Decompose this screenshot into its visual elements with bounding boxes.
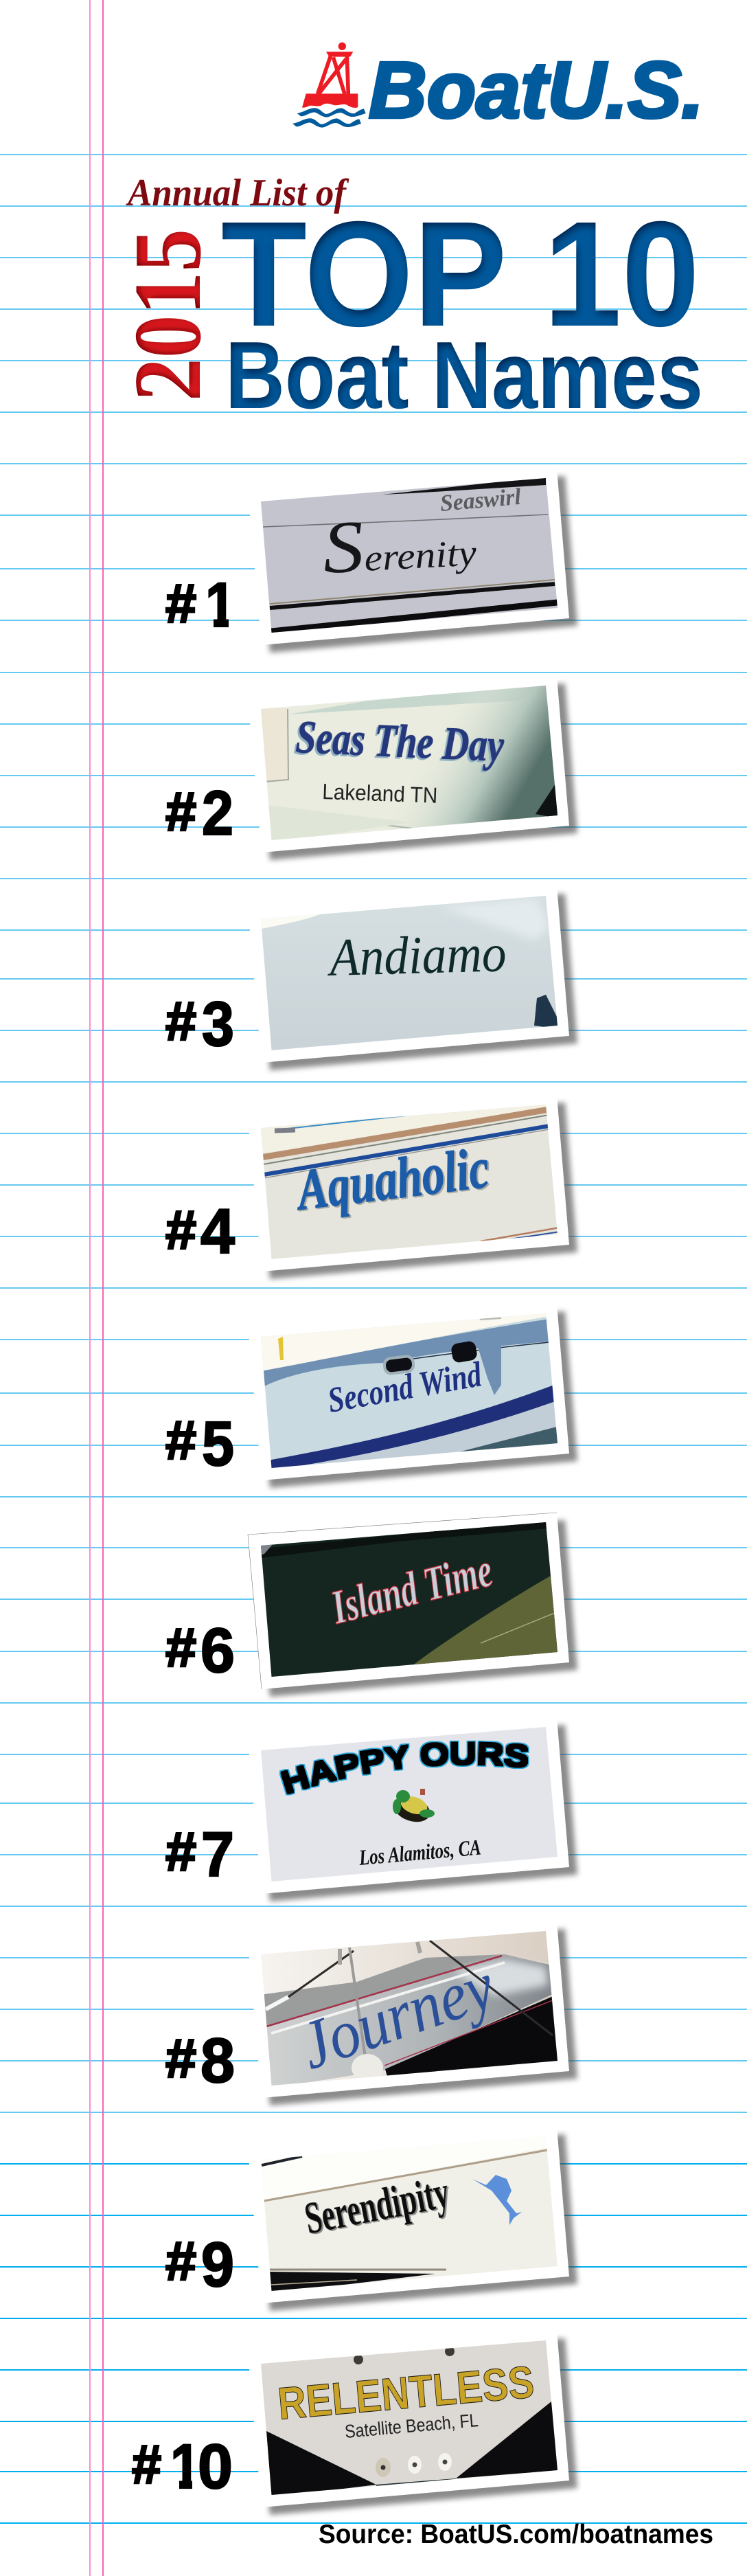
- rank: #1: #: [165, 573, 196, 634]
- rank: #1: 1: [205, 570, 235, 640]
- rank: #10: 0: [198, 2432, 233, 2502]
- rank: #9: [165, 2230, 234, 2300]
- rank: #5: #: [165, 1410, 196, 1471]
- icon: turtle with drink: [393, 1789, 435, 1822]
- subtitle: Annual List of: Annual List of: [126, 172, 349, 214]
- home port: Satellite Beach, FL: Satellite Beach, FL: [344, 2410, 479, 2442]
- rank: #7: [165, 1820, 234, 1890]
- photo card 9: Serendipity: [248, 2127, 577, 2311]
- boat name: Andiamo: Andiamo: [326, 923, 507, 987]
- boat name: Happy Ours: HAPPY OURS: [279, 1741, 529, 1796]
- rank: #10: #: [132, 2434, 161, 2495]
- rank: #6: #: [165, 1617, 196, 1678]
- boat name: Seas The Day: Seas The Day: [295, 710, 505, 771]
- rank: #4: #: [165, 1199, 196, 1261]
- rank: #6: [165, 1616, 235, 1686]
- logo wordmark: BoatU.S.: [369, 45, 704, 135]
- rank: #9: 9: [201, 2230, 234, 2300]
- rank: #2: #: [165, 781, 196, 842]
- rank: #4: [165, 1197, 235, 1267]
- home port: Los Alamitos, CA: Los Alamitos, CA: [358, 1835, 482, 1870]
- boat name: Serendipity: Serendipity: [301, 2167, 453, 2244]
- photo card 2: Seas The Day: [248, 676, 577, 860]
- photo card 8: Journey: [248, 1921, 577, 2105]
- title: TOP 10: TOP 10: [221, 191, 700, 358]
- photo card 3: Andiamo: [248, 886, 577, 1070]
- rank: #3: [165, 989, 234, 1059]
- home port: Lakeland TN: Lakeland TN: [322, 779, 438, 808]
- rank: #2: [165, 778, 233, 848]
- boat name: Journey: Journey: [290, 1947, 504, 2084]
- rank: #7: 7: [201, 1820, 234, 1890]
- photo card 1: Serenity: [248, 468, 577, 653]
- photo card 4: Aquaholic: [248, 1095, 577, 1279]
- rank: #9: #: [165, 2230, 196, 2292]
- rank: #3: #: [165, 991, 196, 1052]
- photo card 10: Relentless: [248, 2331, 577, 2515]
- rank: #7: #: [165, 1821, 196, 1882]
- rank: #2: 2: [202, 778, 233, 848]
- brand badge: Seaswirl: Seaswirl: [439, 484, 522, 517]
- rank: #10: [132, 2443, 231, 2489]
- rank: #8: #: [165, 2028, 196, 2089]
- source line: Source: BoatUS.com/boatnames: [319, 2520, 713, 2549]
- rank: #5: 5: [202, 1409, 234, 1479]
- boat name: Island Time: Island Time: [326, 1544, 498, 1635]
- rank: #3: 3: [202, 989, 234, 1059]
- photo card 7: Happy Ours: [249, 1721, 581, 1905]
- rank: #10: 1: [170, 2432, 200, 2502]
- icon: red buoy and waves: [292, 43, 366, 128]
- photo card 6: Island Time: [248, 1513, 577, 1697]
- boat name: Aquaholic: Aquaholic: [291, 1136, 492, 1223]
- boat name: Relentless: RELENTLESS: [276, 2356, 536, 2429]
- rank: #1: [165, 583, 229, 628]
- rank: #5: [165, 1409, 234, 1479]
- photo card 5: Second Wind: [248, 1304, 577, 1488]
- boat name: Second Wind: Second Wind: [325, 1355, 485, 1421]
- rank: #8: [165, 2026, 235, 2096]
- rank: #6: 6: [200, 1616, 235, 1686]
- boat name: Serenity: Serenity: [321, 499, 478, 589]
- rank: #4: 4: [200, 1197, 235, 1267]
- logo: BoatU.S.: [292, 43, 704, 135]
- rank: #8: 8: [200, 2026, 235, 2096]
- vertical year: 2015: 2015: [115, 229, 221, 401]
- icon: blue marlin: [472, 2175, 522, 2225]
